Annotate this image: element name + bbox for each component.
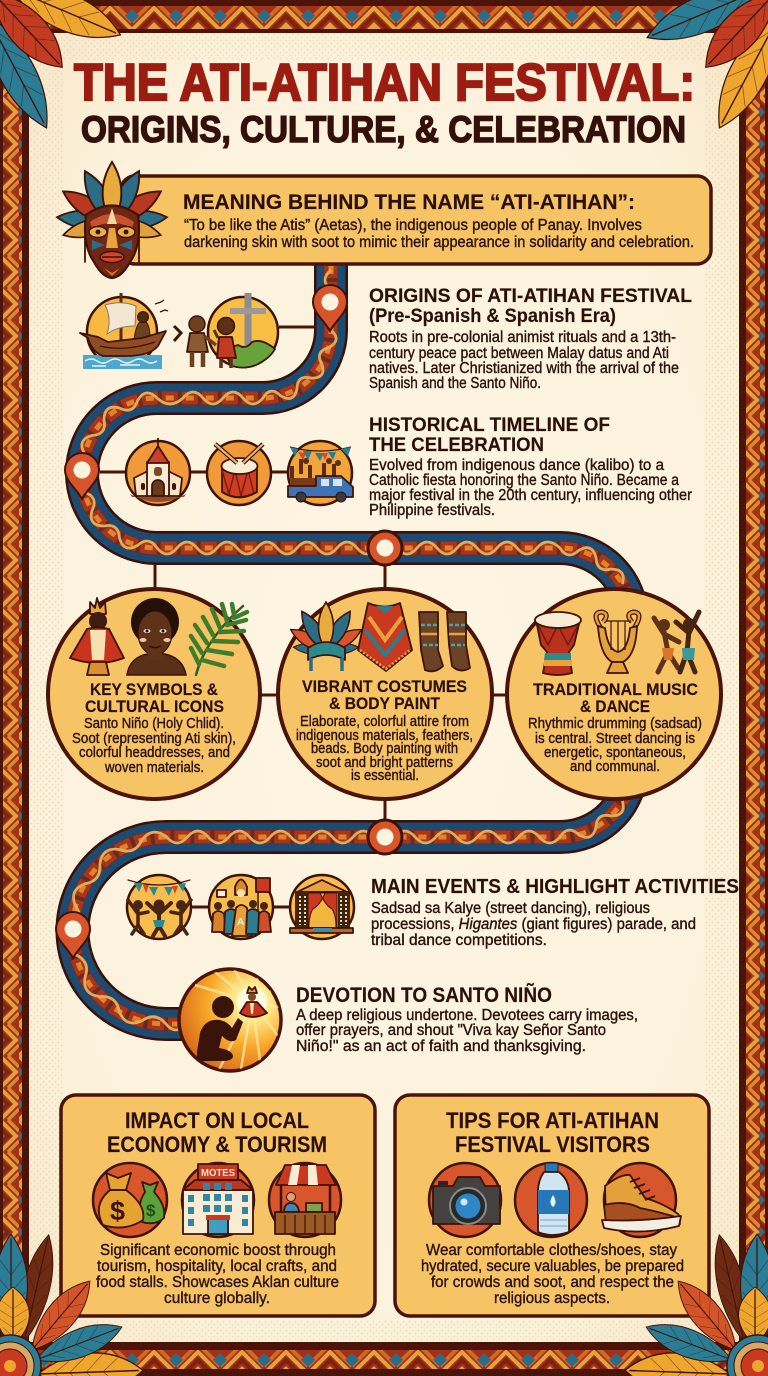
connector lines <box>100 327 510 907</box>
panel: costumes: beads. Body painting with <box>311 741 458 757</box>
text: timeline: Catholic fiesta honoring the Santo Niño. Became a <box>369 472 679 489</box>
icon: poncho <box>358 603 412 671</box>
icon: religious procession: A <box>237 917 244 928</box>
panel: visitor tips: Wear comfortable clothes/shoes, stay <box>426 1242 677 1259</box>
feathers: top left corner <box>0 0 128 136</box>
panel: meaning of the name: “To be like the Atis” (Aetas), the indigenous people of Panay. Involves <box>184 217 642 234</box>
text: main events: MAIN EVENTS & HIGHLIGHT ACTIVITIES <box>371 875 739 898</box>
text: devotion: DEVOTION TO SANTO NIÑO <box>296 984 552 1007</box>
title <box>74 54 695 150</box>
panel: key symbols: woven materials. <box>104 760 204 776</box>
text: main events <box>371 875 739 949</box>
panel: key symbols: colorful headdresses, and <box>79 745 230 761</box>
icon: money bags <box>93 1163 167 1237</box>
panel: music and dance: & DANCE <box>580 698 650 716</box>
pin: main events <box>56 912 90 958</box>
pin: origins <box>313 285 347 331</box>
text: devotion <box>296 984 638 1055</box>
feathers: bottom left corner <box>0 1232 144 1376</box>
icon: camera <box>429 1163 501 1237</box>
panel: music and dance: energetic, spontaneous, <box>544 745 686 761</box>
panel: economy and tourism: food stalls. Showcases Aklan culture <box>96 1274 339 1291</box>
icon: food stall <box>269 1163 341 1237</box>
panel: music and dance: Rhythmic drumming (sadsad) <box>528 716 702 732</box>
panel: economy and tourism: tourism, hospitality, local crafts, and <box>97 1258 337 1275</box>
panel: visitor tips: FESTIVAL VISITORS <box>455 1132 650 1157</box>
step: origins icons <box>80 293 278 369</box>
panel: key symbols: CULTURAL ICONS <box>85 698 224 716</box>
panel: visitor tips: hydrated, secure valuables, be prepared <box>421 1258 684 1275</box>
text: timeline: Philippine festivals. <box>369 502 495 519</box>
panel: costumes: & BODY PAINT <box>329 695 440 713</box>
text: main events: Sadsad sa Kalye (street dancing), religious <box>371 900 650 917</box>
feathers: top right corner <box>640 0 768 137</box>
icon: Santo Nino statue <box>70 598 124 675</box>
text: devotion: Niño!" as an act of faith and thanksgiving. <box>296 1038 586 1055</box>
panel: costumes: soot and bright patterns <box>316 755 453 771</box>
text: devotion: A deep religious undertone. Devotees carry images, <box>296 1007 638 1024</box>
panel: music and dance: and communal. <box>570 759 660 775</box>
node: road junction bottom <box>368 820 402 854</box>
panel: music and dance <box>507 589 721 799</box>
panel: economy and tourism <box>61 1095 375 1316</box>
panel: key symbols: KEY SYMBOLS & <box>90 681 218 699</box>
panel: economy and tourism: IMPACT ON LOCAL <box>125 1108 309 1133</box>
text: origins: ORIGINS OF ATI-ATIHAN FESTIVAL <box>369 285 692 307</box>
panel: costumes: indigenous materials, feathers, <box>296 728 473 744</box>
icon: tribal mask <box>56 162 168 278</box>
text: main events: tribal dance competitions. <box>371 932 547 949</box>
icon: money bags: $ <box>146 1201 156 1220</box>
panel: visitor tips: for crowds and soot, and respect the <box>431 1274 674 1291</box>
icon: dancers <box>654 612 699 672</box>
text: origins: Roots in pre-colonial animist rituals and a 13th- <box>369 329 676 346</box>
icon: water bottle <box>515 1163 587 1237</box>
text: timeline: HISTORICAL TIMELINE OF <box>369 414 610 436</box>
text: timeline: major festival in the 20th century, influencing other <box>369 487 692 504</box>
icon: devotion circle with praying figure <box>177 967 283 1073</box>
icon: parade truck <box>288 441 353 505</box>
panel: visitor tips: TIPS FOR ATI-ATIHAN <box>446 1108 659 1133</box>
icon: hiking boot <box>602 1163 681 1237</box>
icon: hotel <box>182 1163 254 1237</box>
panel: costumes <box>278 589 492 799</box>
text: timeline: Evolved from indigenous dance (kalibo) to a <box>369 457 664 474</box>
icon: religious procession <box>209 875 273 939</box>
icon: street dancers <box>127 875 191 939</box>
panel: key symbols <box>48 589 260 799</box>
icon: Malay datu and Ati figures <box>187 316 236 368</box>
icon: body paint legs <box>419 612 470 671</box>
panel: visitor tips <box>395 1095 709 1316</box>
panel: meaning of the name: darkening skin with soot to mimic their appearance in solidarity and celebration. <box>184 234 694 251</box>
icon: chevron arrow <box>174 326 181 341</box>
text: origins: (Pre-Spanish & Spanish Era) <box>369 305 616 327</box>
panel: music and dance: TRADITIONAL MUSIC <box>533 681 698 699</box>
panel: economy and tourism: culture globally. <box>164 1290 270 1307</box>
panel: key symbols: Soot (representing Ati skin), <box>72 731 236 747</box>
panel: visitor tips: religious aspects. <box>494 1290 610 1307</box>
icon: boat circle <box>80 293 168 369</box>
panel: meaning of the name <box>121 176 711 264</box>
pin: timeline <box>65 453 99 499</box>
panel: meaning of the name: MEANING BEHIND THE NAME “ATI-ATIHAN”: <box>183 190 635 214</box>
text: origins: natives. Later Christianized with the arrival of the <box>369 360 679 377</box>
icon: feather headdress <box>287 602 365 671</box>
panel: costumes: is essential. <box>351 768 419 784</box>
icon: stage <box>290 875 354 939</box>
winding festival road <box>68 262 632 1030</box>
icon: golden lyre <box>596 612 639 673</box>
text: timeline <box>369 414 692 519</box>
text: origins <box>369 285 692 392</box>
title: THE ATI-ATIHAN FESTIVAL: <box>74 54 695 112</box>
text: main events: processions, Higantes (giant figures) parade, and <box>371 916 696 933</box>
panel: key symbols: Santo Niño (Holy Chlid). <box>84 716 224 732</box>
panel: economy and tourism: Significant economic boost through <box>100 1242 336 1259</box>
panel: costumes: Elaborate, colorful attire from <box>300 714 469 730</box>
text: origins: century peace pact between Malay datus and Ati <box>369 345 669 362</box>
icon: djembe drum <box>535 612 581 675</box>
icon: drum <box>207 441 271 505</box>
step: timeline icons <box>126 438 353 505</box>
panel: economy and tourism: ECONOMY & TOURISM <box>107 1132 327 1157</box>
icon: Ati man portrait <box>127 598 186 675</box>
feathers: bottom right corner <box>624 1232 768 1376</box>
step: main event icons <box>127 875 354 939</box>
icon: cross circle <box>208 293 278 368</box>
icon: hotel: MOTES <box>201 1167 235 1179</box>
text: origins: Spanish and the Santo Niño. <box>369 375 541 392</box>
icon: palm frond <box>191 604 247 675</box>
text: devotion: offer prayers, and shout "Viva kay Señor Santo <box>296 1022 606 1039</box>
panel: music and dance: is central. Street dancing is <box>535 731 695 747</box>
text: timeline: THE CELEBRATION <box>369 434 544 456</box>
panel: costumes: VIBRANT COSTUMES <box>302 678 467 696</box>
icon: church <box>126 438 190 505</box>
title: ORIGINS, CULTURE, & CELEBRATION <box>81 109 686 150</box>
node: road junction top <box>368 531 402 565</box>
icon: money bags: $ <box>110 1196 125 1226</box>
